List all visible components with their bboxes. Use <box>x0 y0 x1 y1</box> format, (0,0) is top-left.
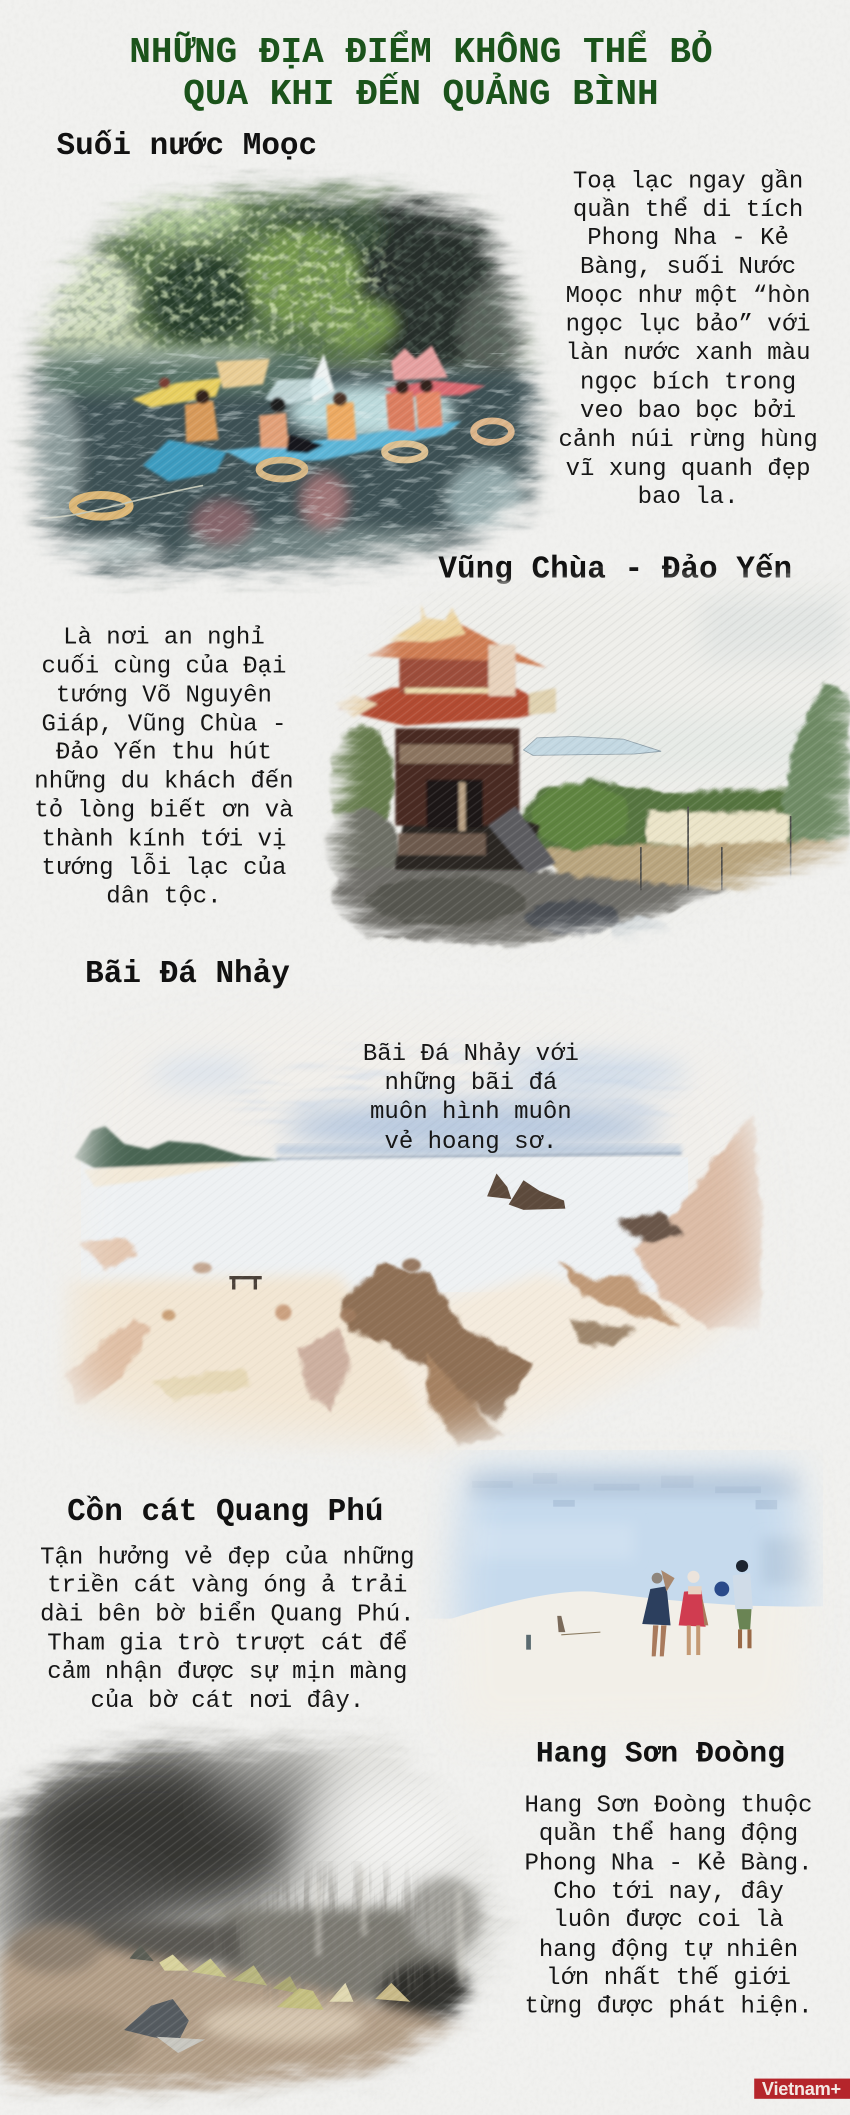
text: Bãi Đá Nhảy: vẻ hoang sơ. <box>384 1129 557 1156</box>
text: Vũng Chùa - Đảo Yến: những du khách đến <box>34 769 294 796</box>
text: Vũng Chùa - Đảo Yến: dân tộc. <box>106 883 222 910</box>
text: Hang Sơn Đoòng: Phong Nha - Kẻ Bàng. <box>524 1851 813 1878</box>
tourists <box>526 1560 753 1656</box>
text: Hang Sơn Đoòng: từng được phát hiện. <box>524 1993 813 2020</box>
text: Suối nước Moọc: Moọc như một “hòn <box>566 283 811 310</box>
text: Cồn cát Quang Phú: Tham gia trò trượt cát để <box>47 1630 407 1658</box>
text: Suối nước Moọc: Bàng, suối Nước <box>580 254 796 281</box>
heading: Cồn cát Quang Phú: Cồn cát Quang Phú <box>67 1495 384 1530</box>
text: Bãi Đá Nhảy: muôn hình muôn <box>370 1099 572 1126</box>
text: Cồn cát Quang Phú: triền cát vàng óng ả trải <box>47 1573 407 1600</box>
title: QUA KHI ĐẾN QUẢNG BÌNH <box>183 71 659 115</box>
text: Cồn cát Quang Phú: dài bên bờ biển Quang Phú. <box>40 1601 415 1629</box>
heading: Bãi Đá Nhảy: Bãi Đá Nhảy <box>85 957 290 992</box>
photo: Hang Sơn Đoòng <box>0 1722 518 2108</box>
text: Cồn cát Quang Phú: cảm nhận được sự mịn màng <box>47 1659 407 1686</box>
tents <box>124 1945 410 2053</box>
text: Vũng Chùa - Đảo Yến: tỏ lòng biết ơn và <box>34 798 294 825</box>
text: Vũng Chùa - Đảo Yến: Giáp, Vũng Chùa - <box>41 711 286 738</box>
text: Hang Sơn Đoòng: lớn nhất thế giới <box>546 1965 791 1992</box>
text: Hang Sơn Đoòng: hang động tự nhiên <box>539 1937 798 1964</box>
logo: Vietnam+: Vietnam+ <box>762 2079 841 2099</box>
island cloud <box>523 736 661 755</box>
heading: Vũng Chùa - Đảo Yến: Vũng Chùa - Đảo Yến <box>438 552 792 587</box>
text: Hang Sơn Đoòng: Cho tới nay, đây <box>553 1879 784 1906</box>
text: Cồn cát Quang Phú <box>40 1544 415 1715</box>
text: Suối nước Moọc: cảnh núi rừng hùng <box>558 427 818 454</box>
text: Suối nước Moọc: làn nước xanh màu <box>566 340 811 367</box>
text: Suối nước Moọc: Phong Nha - Kẻ <box>587 225 789 252</box>
text: Suối nước Moọc: veo bao bọc bởi <box>580 398 796 425</box>
text: Vũng Chùa - Đảo Yến: thành kính tới vị <box>41 827 286 854</box>
heading: Suối nước Moọc: Suối nước Moọc <box>57 129 317 164</box>
text: Hang Sơn Đoòng <box>524 1793 813 2020</box>
text: Hang Sơn Đoòng: quần thể hang động <box>539 1820 798 1848</box>
text: Bãi Đá Nhảy: những bãi đá <box>384 1070 557 1097</box>
text: Bãi Đá Nhảy <box>363 1041 579 1156</box>
title <box>129 28 713 115</box>
text: Suối nước Moọc: quần thể di tích <box>573 196 803 224</box>
text: Vũng Chùa - Đảo Yến: Là nơi an nghỉ <box>63 624 265 651</box>
text: Vũng Chùa - Đảo Yến: Đảo Yến thu hút <box>56 740 272 767</box>
photo: Bãi Đá Nhảy <box>62 985 765 1452</box>
text: Hang Sơn Đoòng: Hang Sơn Đoòng thuộc <box>524 1793 813 1820</box>
text: Cồn cát Quang Phú: của bờ cát nơi đây. <box>90 1688 364 1715</box>
text: Suối nước Moọc: ngọc lục bảo” với <box>566 311 811 338</box>
text: Suối nước Moọc: ngọc bích trong <box>580 369 796 396</box>
heading: Hang Sơn Đoòng: Hang Sơn Đoòng <box>536 1737 785 1771</box>
text: Vũng Chùa - Đảo Yến <box>34 624 294 910</box>
text: Vũng Chùa - Đảo Yến: tướng Võ Nguyên <box>56 682 272 709</box>
text: Vũng Chùa - Đảo Yến: tướng lỗi lạc của <box>41 853 286 882</box>
photo: Suối nước Moọc <box>0 162 567 593</box>
text: Cồn cát Quang Phú: Tận hưởng vẻ đẹp của những <box>40 1544 415 1571</box>
text: Suối nước Moọc: Toạ lạc ngay gần <box>573 168 803 195</box>
text: Suối nước Moọc: bao la. <box>638 484 739 511</box>
text: Vũng Chùa - Đảo Yến: cuối cùng của Đại <box>41 653 286 680</box>
photo: Cồn cát Quang Phú <box>436 1450 823 1656</box>
text: Suối nước Moọc: vĩ xung quanh đẹp <box>566 456 811 483</box>
text: Hang Sơn Đoòng: luôn được coi là <box>553 1907 784 1934</box>
title: NHỮNG ĐỊA ĐIỂM KHÔNG THỂ BỎ <box>129 28 713 73</box>
text: Bãi Đá Nhảy: Bãi Đá Nhảy với <box>363 1041 579 1068</box>
text: Suối nước Moọc <box>558 168 818 511</box>
photo: Vũng Chùa - Đảo Yến <box>322 566 850 950</box>
